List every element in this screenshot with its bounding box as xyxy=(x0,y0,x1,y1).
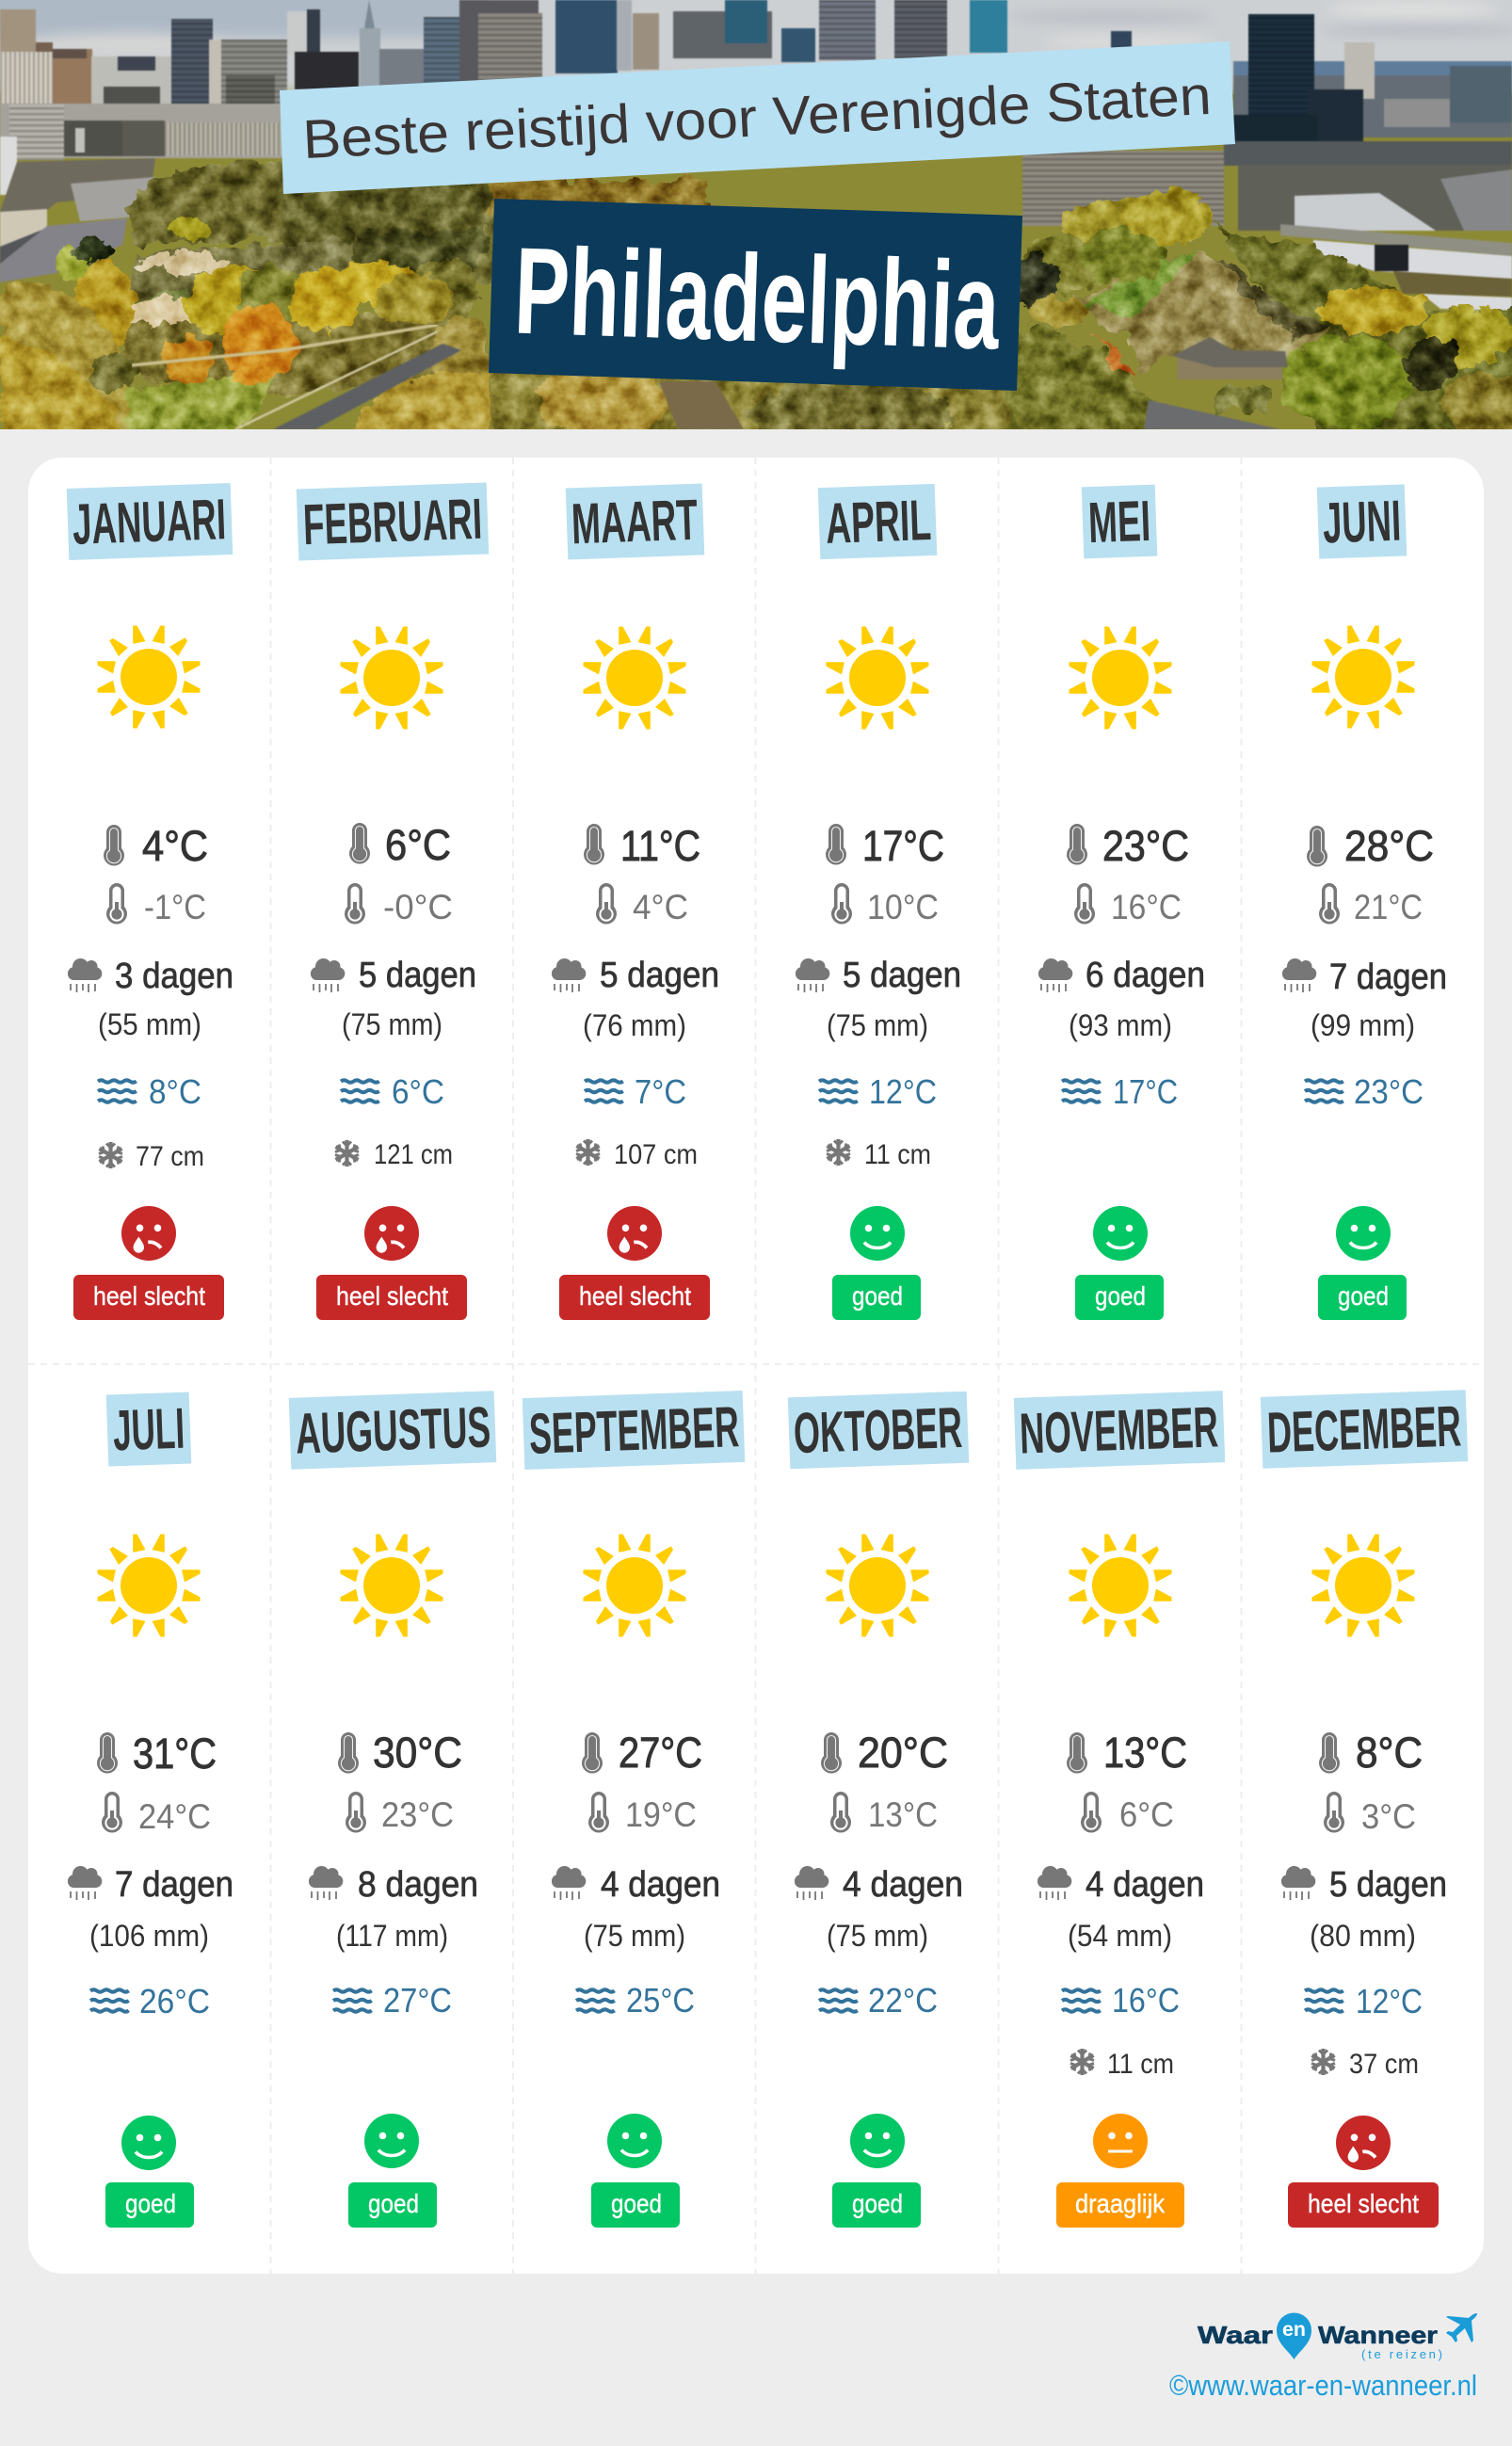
max temperature xyxy=(1307,822,1434,870)
sea temperature xyxy=(1305,1982,1423,2020)
rain days xyxy=(796,956,961,995)
rating badge xyxy=(559,1275,710,1320)
rating badge xyxy=(1318,1275,1407,1320)
snowfall: 121 cm xyxy=(374,1139,453,1170)
rating badge: goed xyxy=(611,2189,662,2218)
min temperature: 21°C xyxy=(1354,888,1423,926)
panel: oktober xyxy=(788,1392,969,2228)
rainfall: (75 mm) xyxy=(827,1919,928,1953)
month heading: april: APRIL xyxy=(825,488,932,555)
rating badge xyxy=(316,1275,467,1320)
rain days: 4 dagen xyxy=(843,1865,963,1905)
month heading: juni xyxy=(1317,484,1407,559)
rating face xyxy=(607,2114,662,2168)
max temperature: 4°C xyxy=(142,822,208,870)
rain days xyxy=(1037,1865,1204,1905)
behind banners xyxy=(277,183,493,248)
max temperature: 17°C xyxy=(862,822,944,870)
min temperature: 10°C xyxy=(867,888,939,926)
mid skyline xyxy=(459,0,539,83)
max temperature: 6°C xyxy=(385,821,451,869)
rain days xyxy=(1281,1865,1447,1905)
sea temperature xyxy=(585,1072,686,1111)
rain days: 7 dagen xyxy=(115,1865,233,1905)
rating badge: heel slecht xyxy=(336,1281,448,1311)
max temperature xyxy=(349,821,451,869)
right skyline xyxy=(1248,14,1314,116)
icon: sun xyxy=(98,1535,200,1636)
rainfall: (75 mm) xyxy=(827,1008,928,1042)
min temperature xyxy=(1081,1792,1174,1834)
rating face xyxy=(1093,2114,1148,2168)
sea temperature xyxy=(1062,1072,1178,1111)
rating badge: goed xyxy=(125,2189,176,2218)
logo: Waar en Wanneer xyxy=(1198,2312,1477,2361)
month heading: april xyxy=(818,484,937,559)
month heading: juni: JUNI xyxy=(1322,489,1402,555)
min temperature xyxy=(346,1792,454,1834)
sea temperature: 22°C xyxy=(868,1981,938,2020)
icon: sun xyxy=(584,1535,685,1636)
rating badge xyxy=(832,2182,921,2228)
rain days: 4 dagen xyxy=(601,1865,720,1905)
max temperature xyxy=(338,1729,462,1777)
rain days xyxy=(795,1865,963,1905)
min temperature: 23°C xyxy=(381,1795,454,1834)
sea temperature xyxy=(341,1072,444,1111)
logo: Waar en Wanneer: (te reizen) xyxy=(1361,2347,1442,2361)
icon: location pin xyxy=(1277,2312,1311,2359)
sea temperature: 26°C xyxy=(139,1982,210,2020)
rating badge xyxy=(591,2182,680,2228)
panel: juni xyxy=(1282,484,1447,1320)
sea temperature xyxy=(98,1072,201,1111)
rain days xyxy=(552,956,719,995)
rain days xyxy=(1282,957,1447,997)
max temperature xyxy=(1067,1729,1187,1777)
max temperature: 28°C xyxy=(1344,822,1434,870)
logo: Waar en Wanneer: Wanneer xyxy=(1318,2321,1438,2349)
snowfall xyxy=(827,1139,931,1170)
month heading: november: NOVEMBER xyxy=(1019,1394,1219,1466)
panel: januari xyxy=(67,483,233,1320)
icon: sun xyxy=(1312,626,1414,728)
rating badge: goed xyxy=(368,2189,419,2218)
min temperature: 24°C xyxy=(138,1797,211,1836)
rainfall: (75 mm) xyxy=(584,1919,685,1953)
month heading: september: SEPTEMBER xyxy=(528,1394,740,1466)
rating face xyxy=(1093,1206,1148,1261)
river xyxy=(1238,165,1512,231)
rating badge: goed xyxy=(852,1281,903,1311)
icon: sun xyxy=(584,627,685,729)
rating badge xyxy=(105,2182,194,2228)
sea temperature: 12°C xyxy=(869,1072,937,1111)
sea temperature: 12°C xyxy=(1356,1982,1423,2020)
min temperature xyxy=(102,1792,211,1836)
month heading: juli: JULI xyxy=(112,1396,185,1462)
max temperature: 31°C xyxy=(133,1730,217,1778)
icon: airplane xyxy=(1446,2313,1477,2342)
min temperature xyxy=(596,883,688,926)
sea temperature: 27°C xyxy=(383,1981,452,2020)
rainfall: (55 mm) xyxy=(98,1007,201,1041)
rating face xyxy=(121,1206,176,1261)
yellow trees xyxy=(72,261,135,351)
rating face xyxy=(364,1206,419,1261)
month heading: februari: FEBRUARI xyxy=(302,487,483,556)
sea temperature: 23°C xyxy=(1354,1072,1424,1111)
rainfall: (117 mm) xyxy=(336,1919,448,1953)
rainfall: (75 mm) xyxy=(342,1007,442,1041)
max temperature xyxy=(582,1729,702,1777)
month heading: augustus: AUGUSTUS xyxy=(295,1394,491,1466)
max temperature xyxy=(1067,822,1189,870)
rating badge: goed xyxy=(852,2189,903,2218)
snowfall: 107 cm xyxy=(614,1139,698,1170)
lower left buildings xyxy=(0,104,282,158)
month heading: januari: JANUARI xyxy=(72,487,227,556)
min temperature xyxy=(345,883,453,926)
panel: juli xyxy=(68,1392,233,2228)
icon: sun xyxy=(1070,627,1171,729)
max temperature: 13°C xyxy=(1103,1729,1187,1777)
sea temperature: 17°C xyxy=(1113,1072,1178,1111)
rating badge: draaglijk xyxy=(1075,2189,1166,2218)
icon: sun xyxy=(827,1535,928,1636)
rain days xyxy=(552,1865,720,1905)
month heading: oktober xyxy=(788,1392,969,1469)
field xyxy=(127,237,353,301)
min temperature: 16°C xyxy=(1111,888,1182,926)
sea temperature: 25°C xyxy=(626,1981,695,2020)
month heading: maart: MAART xyxy=(571,488,699,555)
sea temperature xyxy=(1062,1981,1180,2020)
sea temperature xyxy=(819,1072,937,1111)
snowfall xyxy=(335,1139,453,1170)
icon: sun xyxy=(1312,1535,1414,1636)
column and row dividers xyxy=(28,458,1484,2274)
rating face xyxy=(364,2114,419,2168)
snowfall xyxy=(1311,2049,1419,2080)
rain days xyxy=(311,956,476,995)
rating badge xyxy=(1056,2182,1184,2228)
rating badge: goed xyxy=(1095,1281,1146,1311)
panel: mei xyxy=(1038,485,1205,1320)
title banner: Beste reistijd voor Verenigde Staten: Beste reistijd voor Verenigde Staten xyxy=(301,65,1213,170)
rain days xyxy=(68,1865,233,1905)
month heading: september xyxy=(523,1391,745,1470)
rain days: 5 dagen xyxy=(600,956,719,995)
city title banner: Philadelphia: Philadelphia xyxy=(512,221,1003,376)
rating face xyxy=(607,1206,662,1261)
rating badge xyxy=(73,1275,224,1320)
snowfall xyxy=(99,1141,204,1172)
rating badge: heel slecht xyxy=(1308,2189,1419,2218)
sea temperature: 16°C xyxy=(1112,1981,1180,2020)
max temperature: 23°C xyxy=(1102,822,1189,870)
rating badge: heel slecht xyxy=(93,1281,205,1311)
rain days xyxy=(309,1865,478,1905)
rain days xyxy=(1038,956,1205,995)
snowfall: 11 cm xyxy=(864,1139,931,1170)
max temperature xyxy=(1319,1729,1423,1777)
panel: augustus xyxy=(289,1391,496,2228)
max temperature xyxy=(97,1730,217,1778)
min temperature xyxy=(1074,883,1182,926)
max temperature: 20°C xyxy=(858,1729,948,1777)
min temperature: 13°C xyxy=(868,1795,938,1834)
panel: december xyxy=(1261,1390,1468,2228)
rating face xyxy=(1336,1206,1391,1261)
min temperature: 4°C xyxy=(633,888,688,926)
rating badge: goed xyxy=(1338,1281,1389,1311)
rainfall: (93 mm) xyxy=(1069,1008,1172,1042)
rainfall: (99 mm) xyxy=(1311,1008,1415,1042)
sea temperature: 8°C xyxy=(149,1072,201,1111)
rainfall: (76 mm) xyxy=(583,1008,686,1042)
main dark tree line xyxy=(127,160,499,287)
min temperature xyxy=(1324,1792,1416,1836)
min temperature: -0°C xyxy=(383,888,453,926)
rain days: 5 dagen xyxy=(359,956,476,995)
rating badge xyxy=(348,2182,437,2228)
city title banner: Philadelphia xyxy=(489,199,1022,391)
rating face xyxy=(850,2114,905,2168)
title banner: Beste reistijd voor Verenigde Staten xyxy=(280,41,1235,194)
icon: sun xyxy=(1070,1535,1171,1636)
sea temperature xyxy=(90,1982,210,2020)
left skyline xyxy=(0,9,36,55)
panel: november xyxy=(1014,1391,1225,2228)
month heading: juli xyxy=(106,1392,191,1467)
panel: maart xyxy=(552,483,719,1320)
min temperature: 6°C xyxy=(1119,1795,1174,1834)
month heading: januari xyxy=(67,483,233,560)
sea temperature xyxy=(333,1981,452,2020)
min temperature: -1°C xyxy=(144,888,206,926)
panel: april xyxy=(796,484,961,1320)
snowfall xyxy=(576,1139,698,1170)
sea temperature: 6°C xyxy=(392,1072,444,1111)
min temperature xyxy=(1319,883,1423,926)
month heading: mei: MEI xyxy=(1087,489,1151,555)
rain days xyxy=(68,957,233,996)
icon: location pin: en xyxy=(1282,2319,1306,2341)
icon: sun xyxy=(341,1535,442,1636)
rainfall: (54 mm) xyxy=(1068,1919,1172,1953)
month heading: maart xyxy=(566,483,704,559)
min temperature xyxy=(831,883,939,926)
snowfall xyxy=(1070,2049,1174,2080)
max temperature xyxy=(826,822,944,870)
rainfall: (80 mm) xyxy=(1310,1919,1416,1953)
road and paths xyxy=(273,344,461,429)
header photo: Philadelphia skyline and park xyxy=(0,0,1512,447)
max temperature: 11°C xyxy=(620,822,700,870)
rating face xyxy=(121,2116,176,2170)
sea temperature: 7°C xyxy=(635,1072,686,1111)
panel: februari xyxy=(297,482,489,1320)
min temperature xyxy=(588,1792,697,1834)
rain days: 3 dagen xyxy=(115,957,233,996)
rain days: 5 dagen xyxy=(843,956,961,995)
icon: sun xyxy=(341,627,442,729)
rating badge: heel slecht xyxy=(579,1281,691,1311)
right park xyxy=(1022,252,1323,372)
rating face xyxy=(1336,2116,1391,2170)
min temperature xyxy=(106,883,206,926)
snowfall: 77 cm xyxy=(136,1141,204,1172)
lower park xyxy=(122,311,452,395)
rain days: 6 dagen xyxy=(1086,956,1205,995)
sea temperature xyxy=(819,1981,938,2020)
month heading: augustus xyxy=(289,1391,496,1470)
panel: september xyxy=(523,1391,745,2228)
month heading: mei xyxy=(1082,485,1157,558)
min temperature xyxy=(830,1792,938,1834)
min temperature: 3°C xyxy=(1361,1797,1416,1836)
sea temperature xyxy=(1305,1072,1424,1111)
month heading: oktober: OKTOBER xyxy=(793,1395,963,1465)
rain days: 5 dagen xyxy=(1329,1865,1447,1905)
snowfall: 11 cm xyxy=(1107,2049,1174,2080)
rating badge xyxy=(1075,1275,1164,1320)
max temperature xyxy=(104,822,208,870)
rain days: 8 dagen xyxy=(358,1865,478,1905)
max temperature: 27°C xyxy=(619,1729,702,1777)
logo: Waar en Wanneer: Waar xyxy=(1198,2321,1273,2349)
rain days: 4 dagen xyxy=(1086,1865,1204,1905)
rain days: 7 dagen xyxy=(1329,957,1447,997)
icon: sun xyxy=(827,627,928,729)
month heading: november xyxy=(1014,1391,1225,1470)
rating badge xyxy=(1288,2182,1439,2228)
rating badge xyxy=(832,1275,921,1320)
white card panel xyxy=(28,458,1484,2274)
sea temperature xyxy=(576,1981,695,2020)
max temperature xyxy=(821,1729,948,1777)
icon: sun xyxy=(98,626,200,728)
snowfall: 37 cm xyxy=(1349,2049,1419,2080)
min temperature: 19°C xyxy=(625,1795,697,1834)
max temperature xyxy=(584,822,700,870)
rainfall: (106 mm) xyxy=(89,1919,209,1953)
month heading: februari xyxy=(297,482,489,561)
rating face xyxy=(850,1206,905,1261)
max temperature: 30°C xyxy=(373,1729,462,1777)
max temperature: 8°C xyxy=(1356,1729,1423,1777)
website credit: ©www.waar-en-wanneer.nl xyxy=(1169,2369,1477,2402)
